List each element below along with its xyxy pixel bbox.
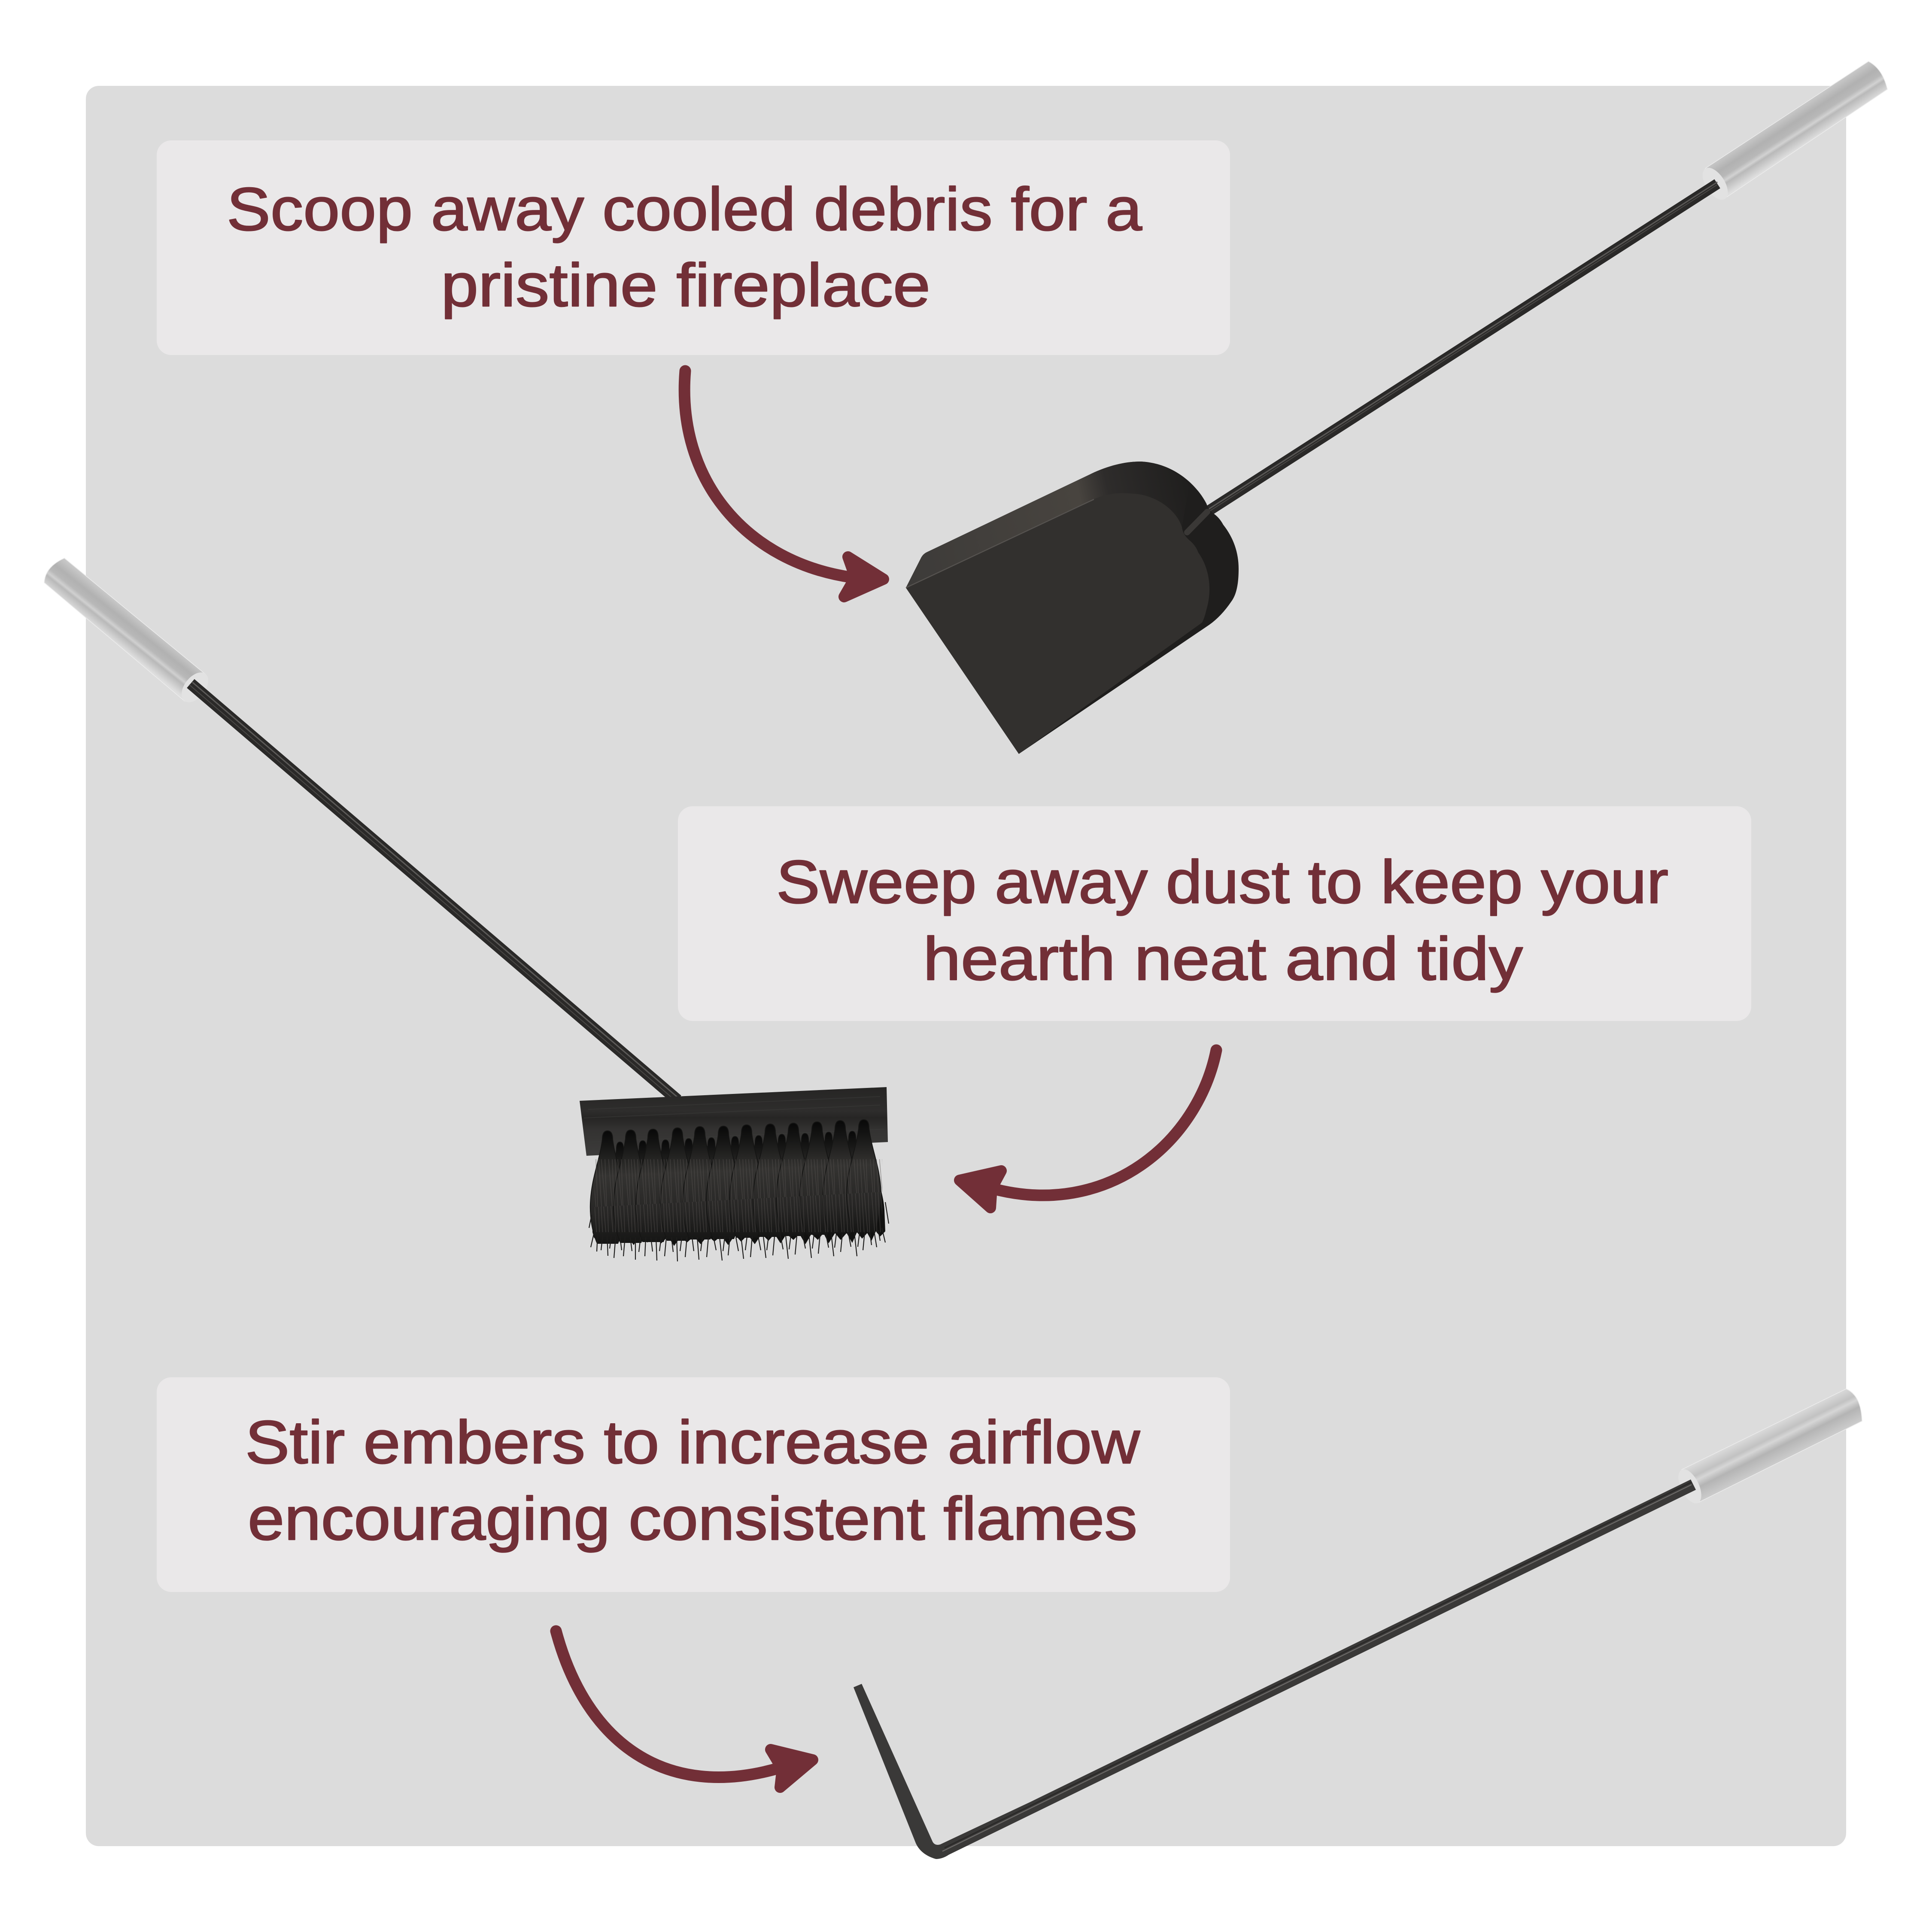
arrow: sweep callout to brush [960, 1050, 1216, 1208]
brush shaft [189, 682, 679, 1101]
tool: poker [854, 1389, 1862, 1859]
brush wooden head [580, 1087, 888, 1156]
tool: shovel [906, 61, 1887, 754]
callout: scoop: pristine fireplace [441, 251, 930, 319]
shovel blade [906, 462, 1239, 754]
callout: scoop [157, 140, 1230, 355]
callout: stir [157, 1377, 1230, 1592]
poker rod [854, 1479, 1696, 1859]
arrow: scoop callout to shovel [684, 371, 884, 597]
arrow: stir callout to poker [556, 1631, 813, 1787]
poker handle [1674, 1389, 1862, 1507]
callout: stir: Stir embers to increase airflow [245, 1408, 1140, 1476]
callout: scoop: Scoop away cooled debris for a [227, 175, 1142, 243]
tool: brush [44, 558, 889, 1261]
shovel handle [1698, 61, 1887, 204]
callout: sweep [678, 806, 1751, 1021]
brush bristles [589, 1120, 889, 1261]
brush handle [44, 558, 214, 707]
callout: sweep: Sweep away dust to keep your [776, 848, 1668, 916]
callout: sweep: hearth neat and tidy [923, 925, 1523, 993]
callout: stir: encouraging consistent flames [248, 1485, 1137, 1553]
shovel shaft [1209, 182, 1717, 512]
